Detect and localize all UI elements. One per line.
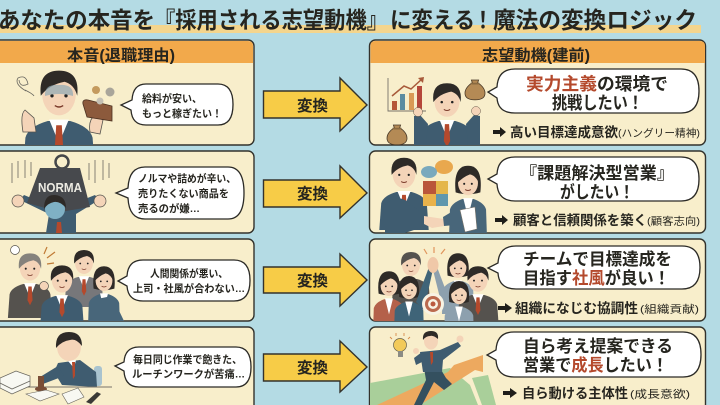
illustration: team high five with target	[373, 247, 498, 321]
speech bubble: merit-based environment	[488, 69, 699, 113]
speech bubble: sales quota is hard: 売りたくない商品を	[138, 187, 229, 200]
appeal point: hungry spirit	[493, 124, 700, 140]
arrow: convert 2: 変換	[297, 184, 328, 203]
column header: honne	[0, 41, 253, 64]
illustration: confident man with rising chart	[386, 77, 486, 145]
appeal point: cooperation: (組織貢献)	[640, 302, 699, 316]
appeal point: self-starter: (成長意欲)	[630, 388, 690, 400]
appeal point: self-starter: 自ら動ける主体性	[522, 385, 628, 401]
speech bubble: team culture: 目指す社風が良い！	[523, 268, 670, 288]
arrow: convert 4	[264, 341, 367, 392]
appeal point: self-starter	[503, 385, 690, 401]
appeal point: building trust: 顧客と信頼関係を築く	[513, 212, 647, 228]
illustration: man crushed by norma weight	[12, 156, 109, 233]
speech bubble: solution sales: がしたい！	[560, 182, 634, 202]
appeal point: hungry spirit: (ハングリー精神)	[618, 126, 700, 140]
illustration: man running up a growth arrow	[370, 331, 496, 405]
speech bubble: proactive growth: 営業で成長したい！	[523, 355, 668, 375]
appeal point: cooperation: 組織になじむ協調性	[515, 300, 639, 316]
title: 魔法の変換ロジック	[493, 7, 697, 33]
speech bubble: sales quota is hard: ノルマや詰めが辛い、	[138, 172, 236, 185]
speech bubble: low salary: もっと稼ぎたい！	[142, 107, 222, 120]
speech bubble: repetitive work	[115, 347, 251, 387]
panel: row 4 honne	[0, 327, 254, 405]
speech bubble: team culture	[488, 246, 700, 289]
speech bubble: team culture: チームで目標達成を	[523, 249, 672, 269]
speech bubble: merit-based environment: 実力主義の環境で	[526, 74, 668, 94]
speech bubble: sales quota is hard: 売るのが嫌…	[138, 202, 200, 215]
panel: row 2 tatemae	[370, 151, 706, 238]
speech bubble: low salary: 給料が安い、	[142, 92, 202, 105]
panel: row 2 honne	[0, 151, 254, 233]
illustration: office conflict with angry boss	[8, 246, 124, 330]
title: あなたの本音を	[0, 7, 155, 33]
speech bubble: solution sales	[488, 157, 699, 202]
speech bubble: bad relationships: 上司・社風が合わない…	[133, 282, 245, 295]
speech bubble: repetitive work: 毎日同じ作業で飽きた、	[133, 353, 242, 366]
illustration: handshake with client and puzzle	[379, 158, 487, 238]
panel: row 3 tatemae	[368, 238, 706, 322]
speech bubble: bad relationships: 人間関係が悪い、	[150, 267, 228, 280]
arrow: convert 3	[264, 254, 367, 306]
appeal point: building trust: (顧客志向)	[647, 214, 700, 228]
speech bubble: merit-based environment: 挑戦したい！	[552, 93, 643, 113]
arrow: convert 3: 変換	[297, 271, 328, 290]
arrow: convert 1	[264, 78, 367, 131]
title	[0, 7, 701, 33]
illustration: bored man stamping paperwork	[0, 332, 112, 404]
speech bubble: proactive growth	[487, 332, 701, 377]
illustration: worried man with empty wallet	[16, 70, 114, 145]
speech bubble: low salary	[121, 84, 233, 125]
title: ！	[473, 7, 493, 33]
speech bubble: bad relationships	[118, 260, 250, 301]
appeal point: hungry spirit: 高い目標達成意欲	[510, 124, 618, 140]
speech bubble: solution sales: 『課題解決型営業』	[520, 164, 674, 183]
arrow: convert 4: 変換	[297, 358, 328, 377]
title: に変える	[390, 7, 475, 33]
panel: row 4 tatemae	[370, 327, 706, 405]
appeal point: cooperation	[498, 300, 699, 316]
column header: tatemae: 志望動機(建前)	[482, 46, 590, 64]
panel: honne column header and row 1	[0, 39, 255, 146]
column header: honne: 本音(退職理由)	[67, 46, 175, 64]
speech bubble: sales quota is hard	[116, 167, 244, 219]
speech bubble: proactive growth: 自ら考え提案できる	[523, 336, 673, 356]
speech bubble: repetitive work: ルーチンワークが苦痛…	[132, 368, 245, 380]
arrow: convert 1: 変換	[297, 96, 328, 115]
title: 『採用される志望動機』	[154, 7, 388, 33]
panel: row 3 honne	[0, 239, 254, 330]
column header: tatemae	[370, 41, 705, 64]
arrow: convert 2	[264, 166, 367, 218]
appeal point: building trust	[495, 212, 700, 228]
illustration: man crushed by norma weight: NORMA	[38, 180, 83, 195]
panel: tatemae column header and row 1	[368, 39, 706, 146]
